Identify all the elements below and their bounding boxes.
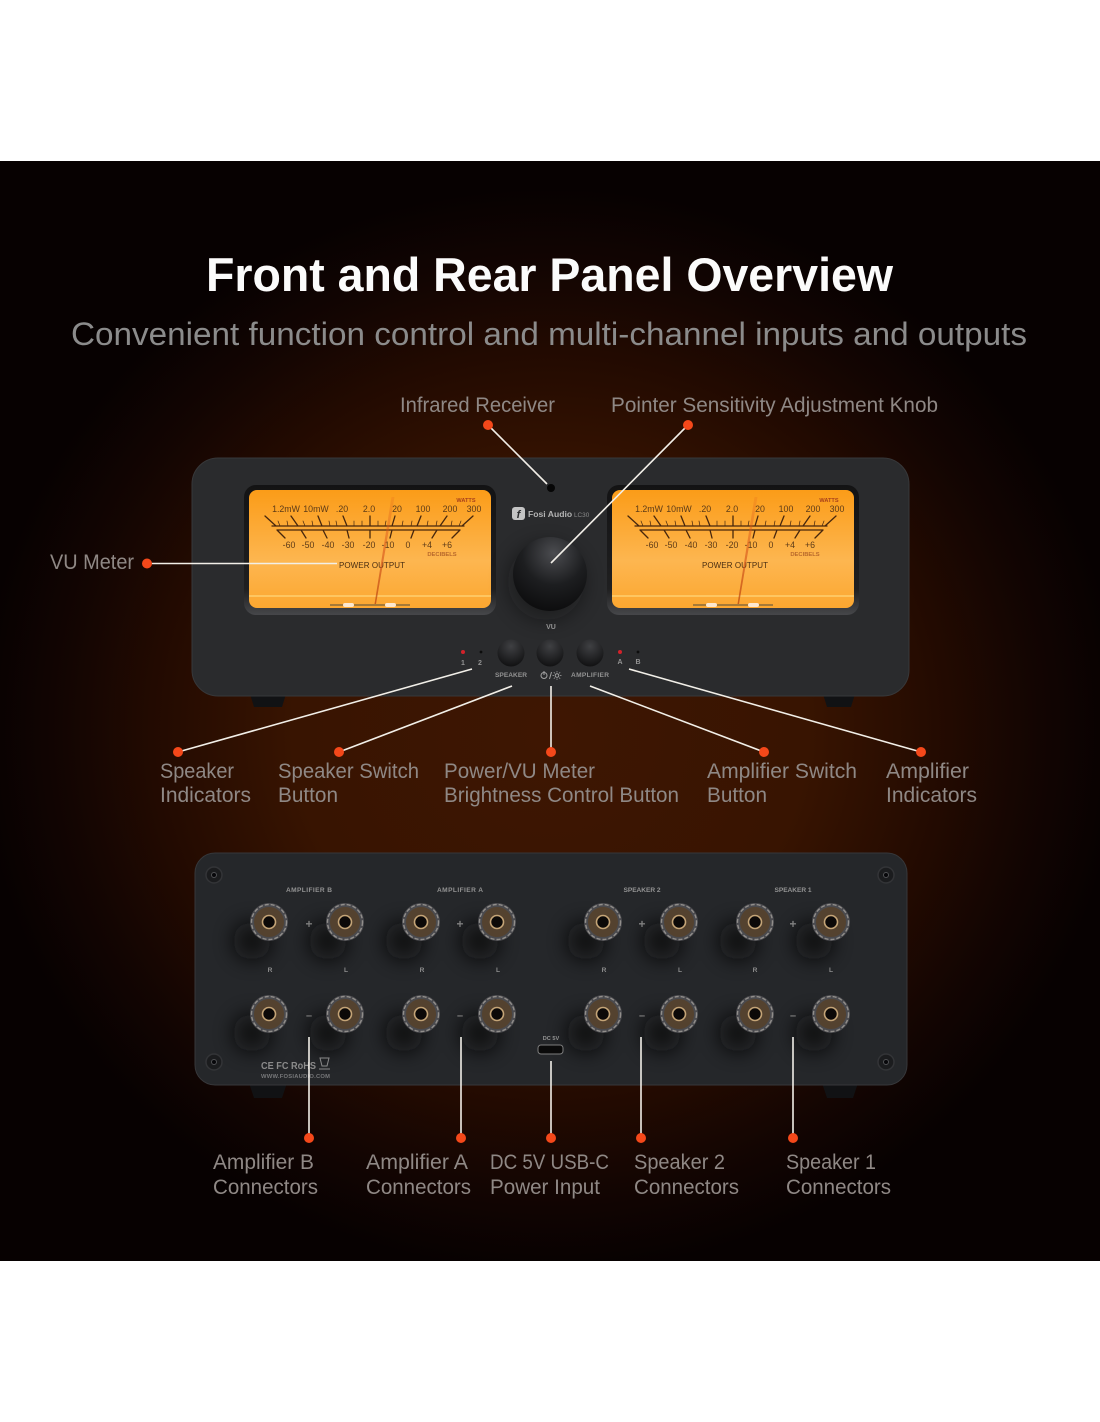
callout: Speaker Indicators: Indicators	[160, 784, 251, 807]
right VU meter: -60	[646, 540, 658, 550]
left VU meter: 100	[416, 504, 430, 514]
Fosi Audio logo: LC30	[574, 512, 590, 519]
right VU meter: POWER OUTPUT	[702, 561, 768, 570]
right VU meter: 20	[755, 504, 765, 514]
post labels: SPEAKER 1	[774, 887, 812, 894]
left VU meter: POWER OUTPUT	[339, 561, 405, 570]
amplifier indicators: A	[617, 659, 623, 666]
left VU meter: .20	[336, 504, 348, 514]
sensitivity knob	[508, 537, 587, 620]
callout: Amplifier Switch Button: Amplifier Switch	[707, 760, 857, 783]
right VU meter: 300	[830, 504, 844, 514]
infrared receiver	[547, 484, 555, 492]
callout: Amplifier B Connectors: Connectors	[213, 1176, 318, 1199]
callout: VU Meter: VU Meter	[50, 551, 134, 574]
left VU meter: 20	[392, 504, 402, 514]
left VU meter: -60	[283, 540, 295, 550]
callout: DC 5V USB-C Power Input: DC 5V USB-C	[490, 1151, 609, 1174]
callout: DC 5V USB-C Power Input: Power Input	[490, 1176, 600, 1199]
post labels: R	[602, 967, 607, 974]
speaker indicators: 2	[478, 660, 482, 667]
callout: Amplifier Indicators: Indicators	[886, 784, 977, 807]
front panel device	[192, 458, 909, 707]
post knurled rings	[252, 904, 848, 1032]
page background	[0, 161, 1100, 1261]
post labels	[268, 887, 833, 1022]
callout: VU Meter	[50, 551, 337, 574]
post labels: R	[420, 967, 425, 974]
left VU meter: WATTS	[456, 498, 476, 504]
binding posts top row	[252, 905, 848, 939]
callout: Speaker Indicators	[160, 669, 472, 807]
rear feet	[249, 1083, 858, 1098]
USB-C port	[538, 1036, 563, 1054]
right VU meter: +4	[785, 540, 795, 550]
callout: Power/VU Meter Brightness Control Button	[444, 686, 679, 807]
amplifier switch button	[571, 640, 609, 679]
callout: Power/VU Meter Brightness Control Button: Power/VU Meter	[444, 760, 595, 783]
power and sun icons	[541, 671, 562, 680]
Fosi Audio logo: Fosi Audio	[528, 509, 572, 519]
callout: Infrared Receiver: Infrared Receiver	[400, 394, 555, 417]
USB-C port: DC 5V	[543, 1036, 560, 1042]
left VU meter: 2.0	[363, 504, 375, 514]
post labels: R	[753, 967, 758, 974]
right VU meter: 2.0	[726, 504, 738, 514]
post shadows	[233, 922, 833, 1052]
right VU meter: .20	[699, 504, 711, 514]
post labels: –	[639, 1010, 645, 1022]
callout: Speaker 1 Connectors	[786, 1037, 891, 1199]
title: Front and Rear Panel Overview	[206, 248, 893, 301]
callout: Pointer Sensitivity Adjustment Knob	[551, 394, 938, 563]
post labels: +	[638, 917, 646, 931]
certification marks: CE FC RoHS	[261, 1060, 316, 1072]
callout: Amplifier A Connectors: Connectors	[366, 1176, 471, 1199]
left VU meter: -50	[302, 540, 314, 550]
callout: Amplifier B Connectors: Amplifier B	[213, 1151, 314, 1174]
post labels: +	[456, 917, 464, 931]
power button	[536, 640, 564, 680]
left VU meter: 1.2mW	[272, 504, 301, 514]
callout: Speaker Indicators: Speaker	[160, 760, 234, 783]
right VU meter: 1.2mW	[635, 504, 664, 514]
callout: Speaker 2 Connectors: Speaker 2	[634, 1151, 725, 1174]
VU label: VU	[546, 624, 556, 631]
left VU meter: 300	[467, 504, 481, 514]
callout: Amplifier A Connectors: Amplifier A	[366, 1151, 468, 1174]
callout: Speaker 1 Connectors: Speaker 1	[786, 1151, 876, 1174]
post holes	[262, 916, 838, 1020]
rear panel body	[195, 853, 907, 1085]
subtitle: Convenient function control and multi-channel inputs and outputs	[71, 316, 1027, 352]
amplifier switch button: AMPLIFIER	[571, 672, 609, 679]
callout: Amplifier Switch Button: Button	[707, 784, 767, 807]
right VU meter: DECIBELS	[790, 552, 820, 558]
post labels: –	[457, 1010, 463, 1022]
callout: Infrared Receiver	[400, 394, 555, 484]
right VU meter: -40	[685, 540, 697, 550]
left VU meter: 0	[406, 540, 411, 550]
rear panel device	[195, 853, 907, 1098]
left VU meter: -20	[363, 540, 375, 550]
front feet	[250, 694, 855, 707]
callout: Power/VU Meter Brightness Control Button: Brightness Control Button	[444, 784, 679, 807]
callout: Amplifier A Connectors	[366, 1037, 471, 1199]
amplifier indicators: B	[635, 659, 641, 666]
right VU meter: -30	[705, 540, 717, 550]
Fosi Audio logo: f	[517, 509, 522, 521]
callout: DC 5V USB-C Power Input	[490, 1061, 609, 1199]
callout: Amplifier Indicators	[629, 669, 977, 807]
amplifier indicators	[617, 650, 641, 666]
post labels: AMPLIFIER A	[437, 887, 483, 894]
right VU meter: -50	[665, 540, 677, 550]
left VU meter: 10mW	[303, 504, 329, 514]
front panel body	[192, 458, 909, 696]
binding posts bottom row	[252, 997, 848, 1031]
callout: Pointer Sensitivity Adjustment Knob: Pointer Sensitivity Adjustment Knob	[611, 394, 938, 417]
right VU meter: -20	[726, 540, 738, 550]
post labels: L	[678, 967, 682, 974]
certification marks: WWW.FOSIAUDIO.COM	[261, 1074, 330, 1080]
callout: Speaker Switch Button	[278, 686, 512, 807]
callout: Speaker Switch Button: Speaker Switch	[278, 760, 419, 783]
post labels: L	[344, 967, 348, 974]
callout: Speaker Switch Button: Button	[278, 784, 338, 807]
speaker indicators	[461, 650, 482, 667]
speaker switch button: SPEAKER	[495, 672, 527, 679]
post labels: AMPLIFIER B	[286, 887, 332, 894]
left VU meter: 200	[443, 504, 457, 514]
left VU meter: +4	[422, 540, 432, 550]
right VU meter: +6	[805, 540, 815, 550]
right VU meter: -10	[745, 540, 757, 550]
right VU meter: 200	[806, 504, 820, 514]
speaker switch button	[495, 640, 527, 679]
callout: Amplifier Switch Button	[590, 686, 857, 807]
left VU meter: -30	[342, 540, 354, 550]
post labels: L	[829, 967, 833, 974]
post labels: +	[789, 917, 797, 931]
right VU meter: 100	[779, 504, 793, 514]
right VU meter	[607, 485, 859, 615]
callout: Speaker 1 Connectors: Connectors	[786, 1176, 891, 1199]
callout: Speaker 2 Connectors	[634, 1037, 739, 1199]
speaker indicators: 1	[461, 660, 465, 667]
post labels: SPEAKER 2	[624, 887, 661, 894]
right VU meter: 10mW	[666, 504, 692, 514]
left VU meter: DECIBELS	[427, 552, 457, 558]
post labels: +	[305, 917, 313, 931]
screws	[206, 867, 894, 1070]
post labels: –	[790, 1010, 796, 1022]
callout: Speaker 2 Connectors: Connectors	[634, 1176, 739, 1199]
left VU meter	[244, 485, 496, 615]
background glow	[0, 161, 1100, 1261]
left VU meter: -10	[382, 540, 394, 550]
post labels: L	[496, 967, 500, 974]
right VU meter: 0	[769, 540, 774, 550]
callout: Amplifier Indicators: Amplifier	[886, 760, 969, 783]
post labels: R	[268, 967, 273, 974]
callout: Amplifier B Connectors	[213, 1037, 318, 1199]
Fosi Audio logo	[512, 507, 590, 521]
left VU meter: +6	[442, 540, 452, 550]
right VU meter: WATTS	[819, 498, 839, 504]
post labels: –	[306, 1010, 312, 1022]
left VU meter: -40	[322, 540, 334, 550]
certification marks	[261, 1058, 330, 1080]
